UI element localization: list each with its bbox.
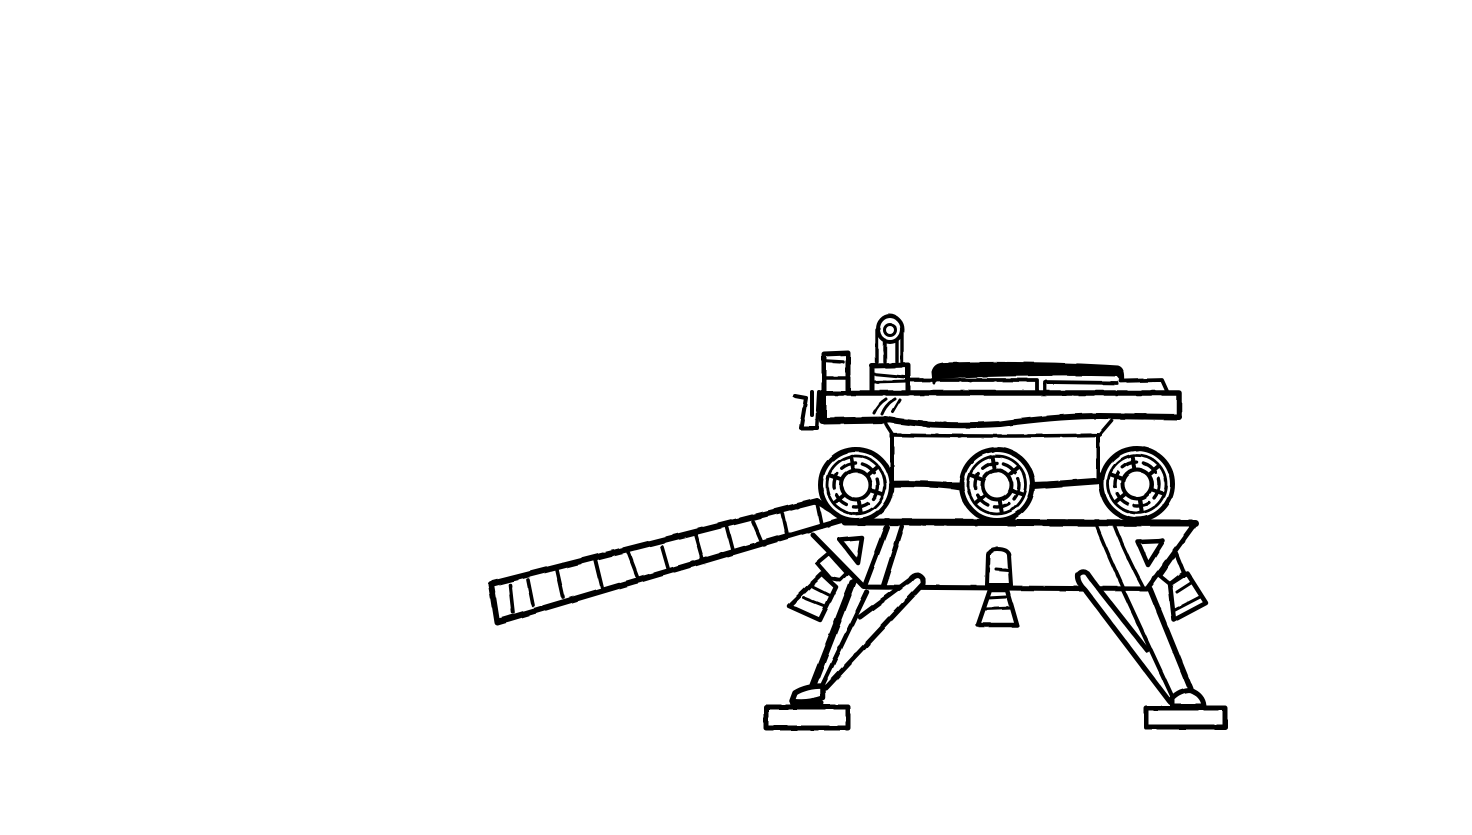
rover deck platform xyxy=(823,393,1179,425)
camera mast xyxy=(872,316,908,390)
left triangle cutout xyxy=(840,538,862,563)
right thruster xyxy=(1160,553,1206,620)
left thruster xyxy=(789,553,847,620)
front hook xyxy=(795,392,819,428)
left landing leg xyxy=(766,575,923,728)
solar panel xyxy=(910,363,1167,391)
right triangle cutout xyxy=(1138,541,1163,565)
ramp xyxy=(491,501,845,622)
lander body xyxy=(813,522,1195,589)
left box instrument xyxy=(824,353,848,391)
center nozzle xyxy=(978,549,1017,625)
wheels xyxy=(820,448,1172,520)
right landing leg xyxy=(1078,572,1225,727)
rover body xyxy=(886,421,1112,488)
